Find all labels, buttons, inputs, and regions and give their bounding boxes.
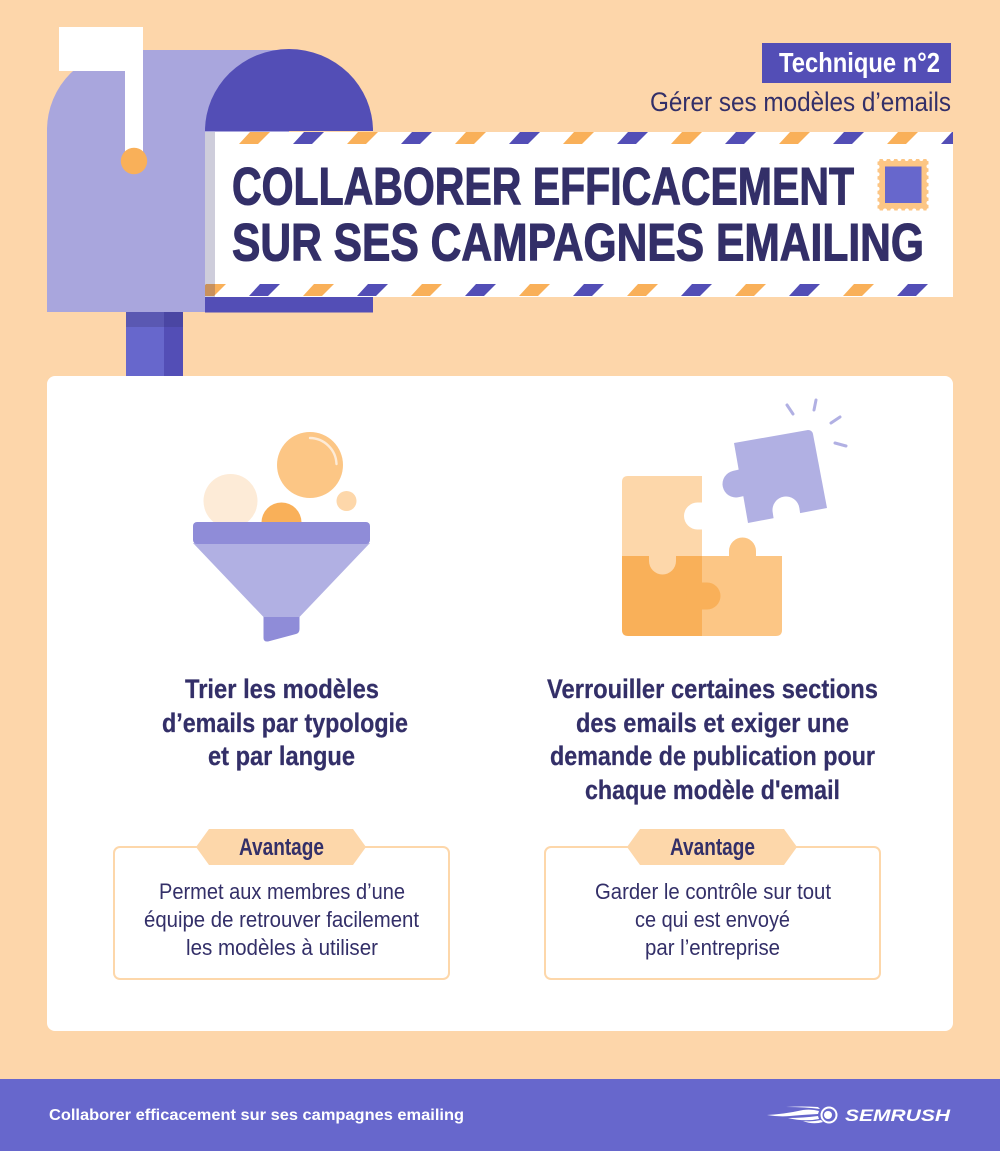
callout: right advantage: Avantage bbox=[670, 834, 755, 861]
heading: left column: et par langue bbox=[208, 741, 355, 771]
callout: left advantage: Permet aux membres d’une bbox=[159, 879, 405, 904]
puzzle: loose purple piece bbox=[734, 430, 827, 523]
callout: left advantage: Avantage bbox=[239, 834, 324, 861]
heading: left column bbox=[162, 674, 408, 771]
puzzle: top left piece bbox=[622, 476, 702, 556]
subtitle: Gérer ses modèles d’emails bbox=[650, 87, 951, 117]
heading: right column: des emails et exiger une bbox=[576, 708, 849, 738]
title bbox=[232, 158, 924, 272]
callout: right advantage bbox=[545, 829, 880, 979]
heading: right column: demande de publication pour bbox=[550, 741, 875, 771]
airmail stripes bottom bbox=[195, 284, 928, 296]
callout: left advantage: les modèles à utiliser bbox=[186, 935, 378, 960]
callout: right advantage: par l’entreprise bbox=[645, 935, 780, 960]
logo: semrush: SEMRUSH bbox=[845, 1106, 951, 1125]
icon: puzzle pieces bbox=[622, 400, 846, 636]
airmail stripes top bbox=[239, 132, 972, 144]
callout: right advantage: Garder le contrôle sur tout bbox=[595, 879, 832, 904]
callout: right advantage: ce qui est envoyé bbox=[635, 907, 790, 932]
heading: right column bbox=[547, 674, 878, 805]
panel: main card bbox=[47, 376, 953, 1031]
badge: technique number bbox=[762, 43, 951, 83]
heading: right column: Verrouiller certaines sections bbox=[547, 674, 878, 704]
footer bar bbox=[0, 1079, 1000, 1151]
icon: mailbox door bottom bbox=[205, 297, 373, 312]
callout: left advantage bbox=[114, 829, 449, 979]
icon: postage stamp bbox=[878, 159, 928, 210]
puzzle: bottom left piece bbox=[622, 556, 702, 636]
logo: semrush bbox=[767, 1106, 951, 1125]
icon: mailbox flag bbox=[59, 27, 147, 174]
icon: mailbox door top bbox=[205, 49, 373, 131]
heading: right column: chaque modèle d'email bbox=[585, 775, 840, 805]
puzzle: bottom right piece bbox=[702, 556, 782, 636]
icon: mailbox post bbox=[126, 312, 183, 377]
sparkle lines bbox=[787, 400, 846, 446]
callout: left advantage: équipe de retrouver facilement bbox=[144, 907, 420, 932]
badge: technique number: Technique n°2 bbox=[779, 47, 940, 78]
icon: funnel with balls bbox=[193, 432, 370, 642]
heading: left column: d’emails par typologie bbox=[162, 708, 408, 738]
footer text: Collaborer efficacement sur ses campagnes emailing bbox=[49, 1107, 464, 1124]
panel: envelope banner bbox=[195, 132, 972, 297]
heading: left column: Trier les modèles bbox=[185, 674, 379, 704]
icon: mailbox body bbox=[47, 50, 289, 312]
